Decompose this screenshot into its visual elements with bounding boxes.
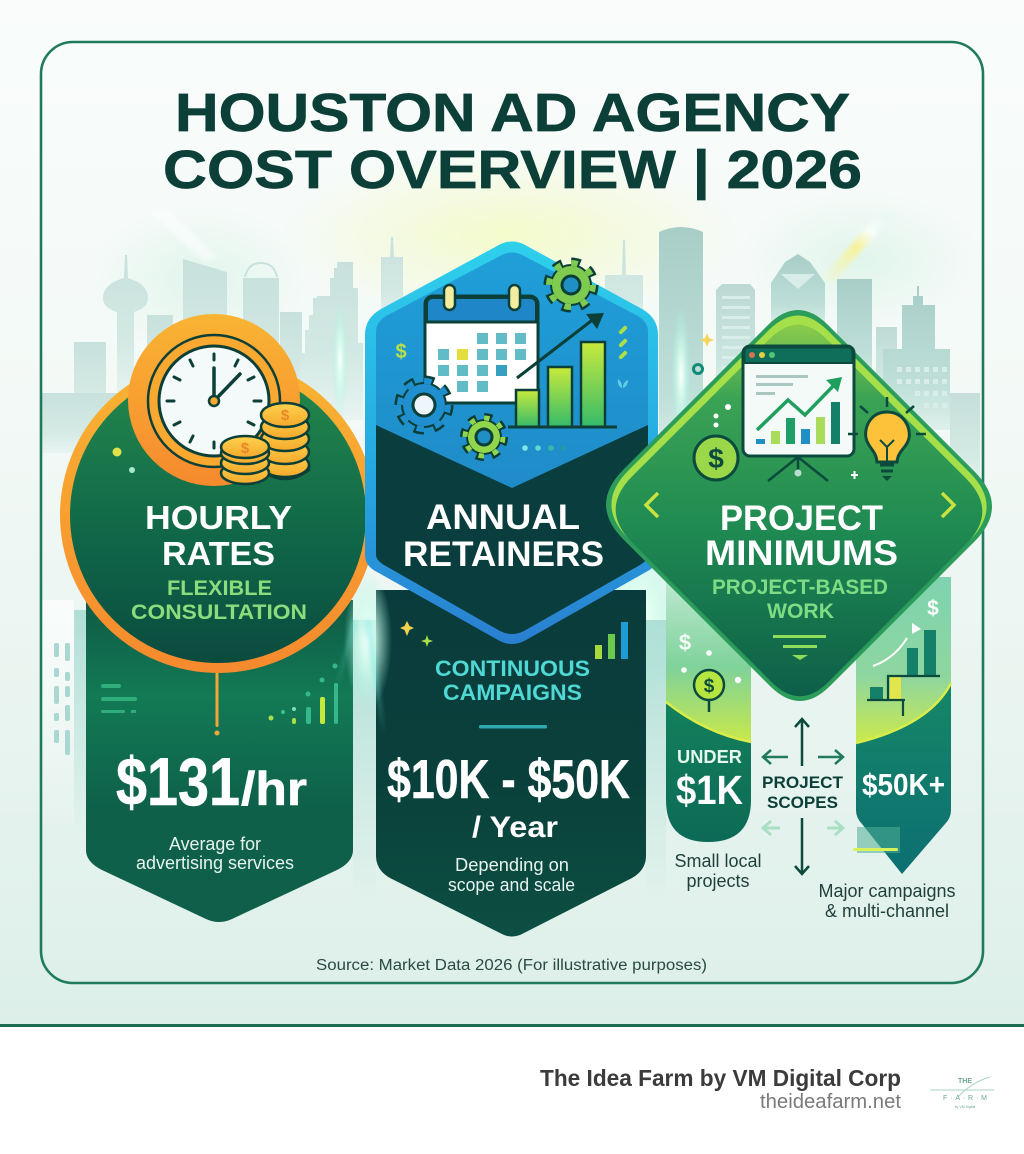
- sparkle dots: [112, 448, 135, 473]
- arrow up: [795, 719, 809, 766]
- price: $10K - $50K: $10K - $50K: [387, 748, 630, 810]
- title: COST OVERVIEW | 2026: [163, 140, 862, 201]
- decorative lines left: [101, 684, 137, 713]
- small projects caption: [674, 851, 762, 891]
- panel: hourly rates lower: [86, 600, 353, 922]
- title: HOUSTON AD AGENCY: [175, 83, 850, 143]
- small decorations: [714, 404, 858, 479]
- coins icon: [221, 403, 309, 484]
- skyline: [42, 212, 980, 483]
- starburst glow: [336, 570, 392, 735]
- coin dollar signs: [241, 407, 290, 457]
- price: $131/hr: /hr: [241, 762, 307, 815]
- arrow down: [795, 818, 809, 874]
- sparkles: [400, 621, 433, 647]
- bar chart with arrow: [508, 313, 617, 427]
- heading: PROJECT: [720, 499, 883, 538]
- footer brand: The Idea Farm by VM Digital Corp: [540, 1065, 901, 1091]
- card border: [41, 42, 983, 983]
- panel: hourly rates circle: [65, 314, 371, 668]
- skyline: dome arc: [245, 263, 277, 277]
- funnel mark: [773, 635, 826, 660]
- heading: RATES: [162, 535, 275, 572]
- subheading: WORK: [767, 600, 834, 623]
- gear: left: [400, 381, 448, 429]
- background glow: [90, 150, 980, 710]
- dark lower body: [376, 425, 648, 634]
- arrow left: [763, 750, 788, 764]
- dollar coin icon: $: [708, 443, 724, 474]
- panel: under 1k: [666, 577, 751, 842]
- heading: HOURLY: [145, 499, 292, 536]
- decorations: [395, 325, 628, 451]
- mini chart: [867, 597, 940, 716]
- heading: RETAINERS: [403, 535, 604, 574]
- divider: [479, 725, 547, 728]
- mini chart: $: [927, 597, 939, 620]
- heading: [145, 499, 292, 572]
- mini bar chart: [595, 622, 628, 659]
- clock icon: [128, 314, 300, 486]
- major campaigns caption: & multi-channel: [825, 901, 949, 921]
- chevrons: [646, 493, 954, 517]
- lightbulb icon: [848, 397, 926, 481]
- footer logo: [930, 1077, 994, 1109]
- project scopes arrows: [763, 719, 843, 874]
- footer url: theideafarm.net: [760, 1091, 901, 1113]
- light beams: [150, 212, 896, 445]
- title: [163, 83, 862, 201]
- coin icon: [694, 670, 724, 712]
- overlay block: [853, 827, 900, 853]
- project scopes label: SCOPES: [767, 793, 838, 812]
- footer logo: by VM Digital: [955, 1105, 976, 1109]
- source note: Source: Market Data 2026 (For illustrative purposes): [316, 957, 707, 974]
- small projects caption: Small local: [674, 851, 762, 871]
- decorations: $: [395, 341, 407, 363]
- panel: project minimums diamond: [606, 310, 992, 701]
- price: $131/hr: $131: [116, 744, 240, 820]
- subheading: CAMPAIGNS: [443, 680, 582, 705]
- skyline: windows: [722, 274, 947, 408]
- value: $50K+: [862, 767, 945, 802]
- side strip left: [42, 600, 666, 900]
- caption: Depending on: [455, 855, 569, 875]
- connector stem: [214, 672, 220, 736]
- left light dashes: [54, 643, 70, 755]
- dollar coin icon: [694, 436, 738, 480]
- heading: [403, 498, 604, 574]
- subheading: [712, 576, 888, 623]
- per year: / Year: [472, 811, 558, 844]
- subheading: [131, 577, 307, 624]
- footer logo: F·A·R·M: [943, 1095, 987, 1102]
- coin icon: $: [704, 676, 715, 697]
- panel: annual retainers lower: [376, 590, 646, 936]
- caption: [136, 834, 294, 873]
- major campaigns caption: Major campaigns: [818, 881, 956, 901]
- subheading: CONSULTATION: [131, 601, 307, 624]
- dollar decorations: $: [679, 630, 691, 655]
- caption: scope and scale: [448, 875, 575, 895]
- small projects caption: projects: [686, 871, 750, 891]
- skyline: left towers: [42, 237, 643, 453]
- dollar decorations: [679, 630, 741, 683]
- heading: [705, 499, 898, 573]
- value: $1K: [676, 767, 743, 813]
- heading: ANNUAL: [426, 498, 580, 537]
- heading: MINIMUMS: [705, 534, 898, 573]
- panel: 50k plus: [853, 577, 951, 874]
- subheading: PROJECT-BASED: [712, 576, 888, 599]
- gear: top right: [549, 263, 593, 307]
- arrow pale left: [763, 821, 780, 835]
- coin dollar signs: $: [241, 440, 250, 457]
- subheading: FLEXIBLE: [167, 577, 272, 600]
- coin dollar signs: $: [281, 407, 290, 424]
- panel: annual retainers hexagon: [365, 242, 658, 644]
- label: UNDER: [677, 747, 742, 767]
- caption: advertising services: [136, 853, 294, 873]
- decorative orb: [694, 333, 714, 374]
- subheading: CONTINUOUS: [435, 656, 590, 681]
- project scopes label: [762, 773, 844, 812]
- calendar icon: [425, 285, 538, 403]
- caption: Average for: [169, 834, 261, 854]
- mini bars right: [268, 664, 338, 724]
- skyline: right towers: [659, 227, 980, 483]
- arrow right: [818, 750, 843, 764]
- chart window icon: [743, 346, 854, 481]
- project scopes label: PROJECT: [762, 773, 844, 792]
- arrow pale right: [827, 821, 843, 835]
- footer bar: [0, 1025, 1024, 1154]
- major campaigns caption: [818, 881, 956, 921]
- gear: bottom: [465, 418, 503, 456]
- footer rule: [0, 1024, 1024, 1027]
- caption: [448, 855, 575, 895]
- footer logo: THE: [958, 1078, 972, 1085]
- subheading: [435, 656, 590, 705]
